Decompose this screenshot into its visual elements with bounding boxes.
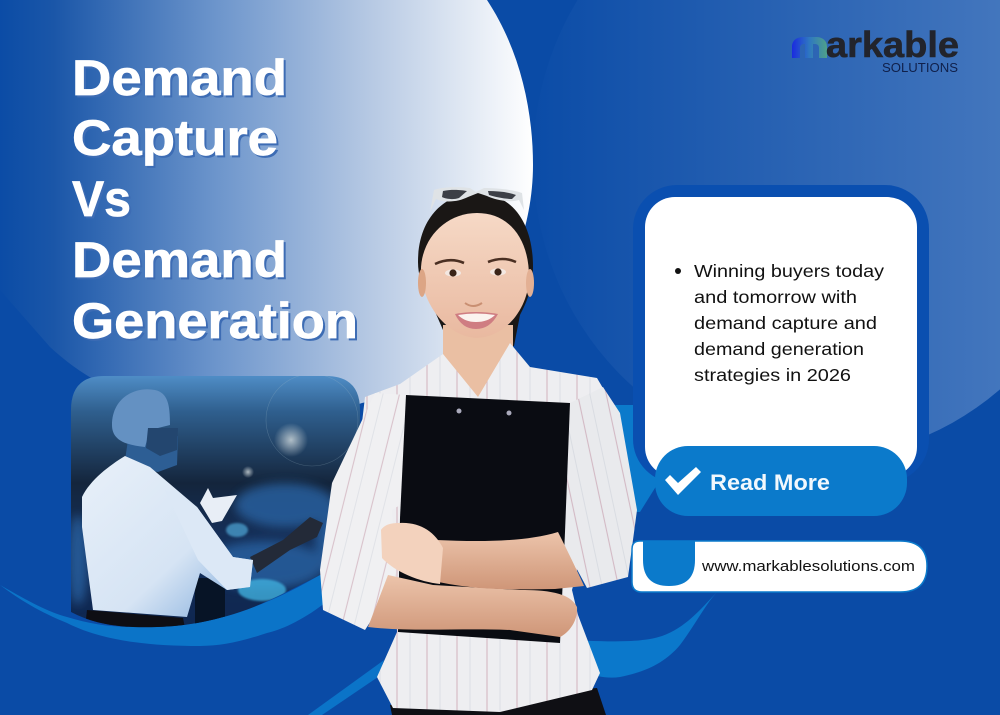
title xyxy=(72,50,358,349)
man: neck and beard xyxy=(125,436,178,472)
panel: text card xyxy=(633,185,929,483)
logo: gradient letter m xyxy=(792,37,827,58)
title: Generation xyxy=(72,293,358,349)
woman: face xyxy=(421,213,529,338)
title: Capture xyxy=(72,110,278,166)
wave: thin sliver lower left xyxy=(308,660,384,715)
logo: solutions: SOLUTIONS xyxy=(882,61,958,75)
woman: neck xyxy=(443,325,513,400)
title: Demand xyxy=(72,232,287,288)
woman: mouth xyxy=(455,312,498,329)
woman: hair back xyxy=(418,193,533,346)
man: belt xyxy=(85,610,185,628)
blue notch xyxy=(643,541,695,586)
woman xyxy=(320,187,637,715)
woman: glasses xyxy=(430,187,524,212)
woman: brows xyxy=(435,260,464,264)
card inner white xyxy=(645,197,917,477)
woman: pants xyxy=(390,688,606,715)
audience blur xyxy=(68,483,365,605)
man: forearm and hand xyxy=(250,517,323,573)
man: shirt xyxy=(82,456,253,617)
photo: speaker on stage xyxy=(68,374,365,631)
background circle: right xyxy=(533,0,1000,458)
url text: www.markablesolutions.com xyxy=(701,558,915,575)
lens flare xyxy=(275,424,307,456)
logo: wordmark: arkable xyxy=(826,24,959,65)
woman: upper arm xyxy=(430,532,584,589)
woman: ears xyxy=(418,269,426,297)
card text: demand generation xyxy=(694,339,864,359)
url pill xyxy=(632,541,927,592)
icon: check mark xyxy=(665,467,701,495)
woman: nose xyxy=(465,303,482,306)
button: read more xyxy=(655,446,907,516)
woman: shirt torso xyxy=(360,343,620,712)
button label: Read More xyxy=(710,470,830,495)
wave: lower right ribbon xyxy=(560,592,717,678)
card text xyxy=(694,261,884,385)
wave: lower left band xyxy=(0,560,400,646)
card text: strategies in 2026 xyxy=(694,365,851,385)
card outer frame xyxy=(633,185,929,483)
woman: fist xyxy=(381,523,443,584)
woman: left sleeve xyxy=(320,393,406,630)
man: raised hand xyxy=(200,488,237,523)
woman: clipboard xyxy=(398,395,570,643)
card text: and tomorrow with xyxy=(694,287,857,307)
bullet xyxy=(675,268,681,274)
wave: behind woman right side xyxy=(560,405,660,512)
card text: demand capture and xyxy=(694,313,877,333)
woman: lower arm xyxy=(368,575,577,637)
card text: Winning buyers today xyxy=(694,261,884,281)
title: Vs xyxy=(72,171,131,227)
background circle: left gradient xyxy=(0,0,533,420)
title: Demand xyxy=(72,50,287,106)
man: hair and head xyxy=(112,389,170,447)
logo xyxy=(792,24,959,75)
woman: right sleeve xyxy=(556,387,637,588)
woman: eyes xyxy=(445,269,461,277)
